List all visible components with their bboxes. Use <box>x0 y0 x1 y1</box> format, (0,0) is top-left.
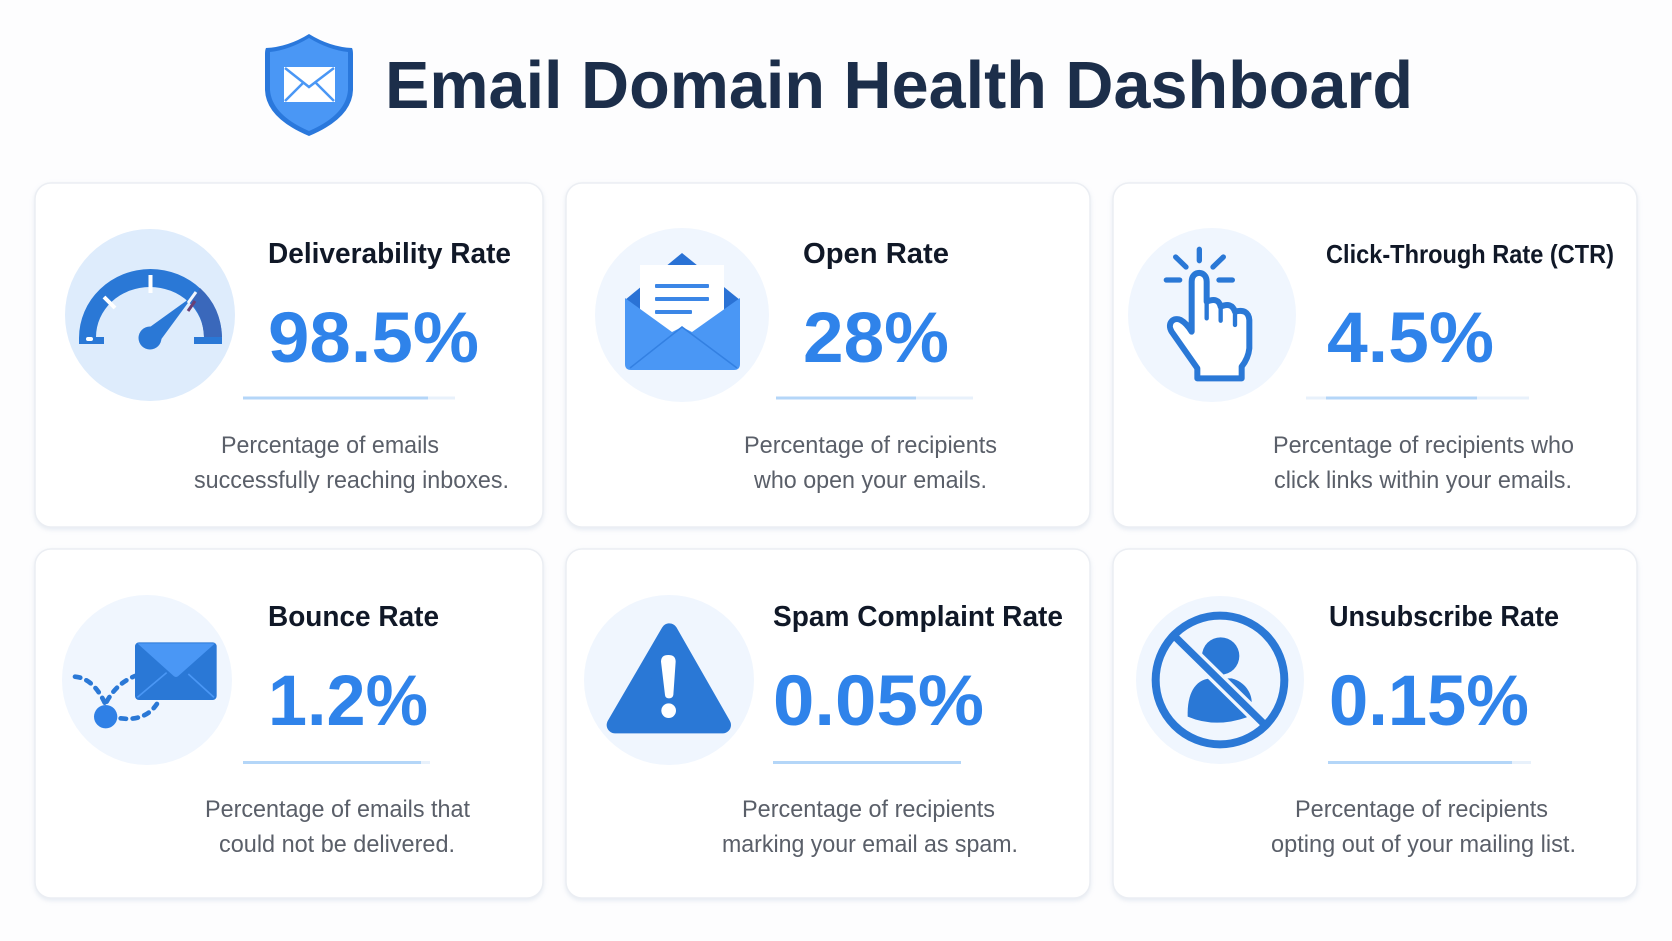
description: Percentage of emails that <box>205 796 470 823</box>
value: 1.2% <box>268 662 428 741</box>
value: 4.5% <box>1327 299 1494 378</box>
description: could not be delivered. <box>219 831 455 858</box>
header <box>265 34 1413 136</box>
panel: spam complaint rate <box>566 549 1090 898</box>
panel: open rate <box>566 183 1090 527</box>
icon: shield with envelope <box>265 34 353 136</box>
divider <box>243 761 430 764</box>
divider <box>773 761 961 764</box>
icon: open envelope <box>595 228 769 402</box>
description: Percentage of recipients who <box>1273 432 1574 459</box>
divider <box>1306 396 1529 400</box>
heading: Unsubscribe Rate <box>1329 601 1559 633</box>
panel: bounce rate <box>35 549 543 898</box>
heading: Deliverability Rate <box>268 238 511 270</box>
value: 0.05% <box>773 662 984 741</box>
description: Percentage of emails <box>221 432 439 459</box>
icon: prohibited user <box>1136 596 1304 764</box>
description: opting out of your mailing list. <box>1271 831 1576 858</box>
icon: warning triangle <box>584 595 754 765</box>
description: Percentage of recipients <box>744 432 997 459</box>
panel: deliverability rate <box>35 183 543 527</box>
description: Percentage of recipients <box>742 796 995 823</box>
heading: Click-Through Rate (CTR) <box>1326 239 1614 269</box>
heading: Open Rate <box>803 238 949 270</box>
icon: bounced envelope <box>62 595 232 765</box>
heading: Spam Complaint Rate <box>773 601 1063 633</box>
divider <box>243 396 455 400</box>
description: click links within your emails. <box>1274 467 1572 494</box>
title: Email Domain Health Dashboard <box>385 48 1413 123</box>
panel: unsubscribe rate <box>1113 549 1637 898</box>
description: marking your email as spam. <box>722 831 1018 858</box>
divider <box>1328 761 1531 764</box>
value: 0.15% <box>1329 662 1529 741</box>
description: Percentage of recipients <box>1295 796 1548 823</box>
value: 28% <box>803 299 949 378</box>
value: 98.5% <box>268 299 479 378</box>
divider <box>776 396 973 400</box>
description: successfully reaching inboxes. <box>194 467 509 494</box>
panel: click-through rate <box>1113 183 1637 527</box>
description: who open your emails. <box>753 467 987 494</box>
icon: speedometer gauge <box>65 229 235 401</box>
icon: pointing hand click <box>1128 228 1296 402</box>
heading: Bounce Rate <box>268 601 439 633</box>
